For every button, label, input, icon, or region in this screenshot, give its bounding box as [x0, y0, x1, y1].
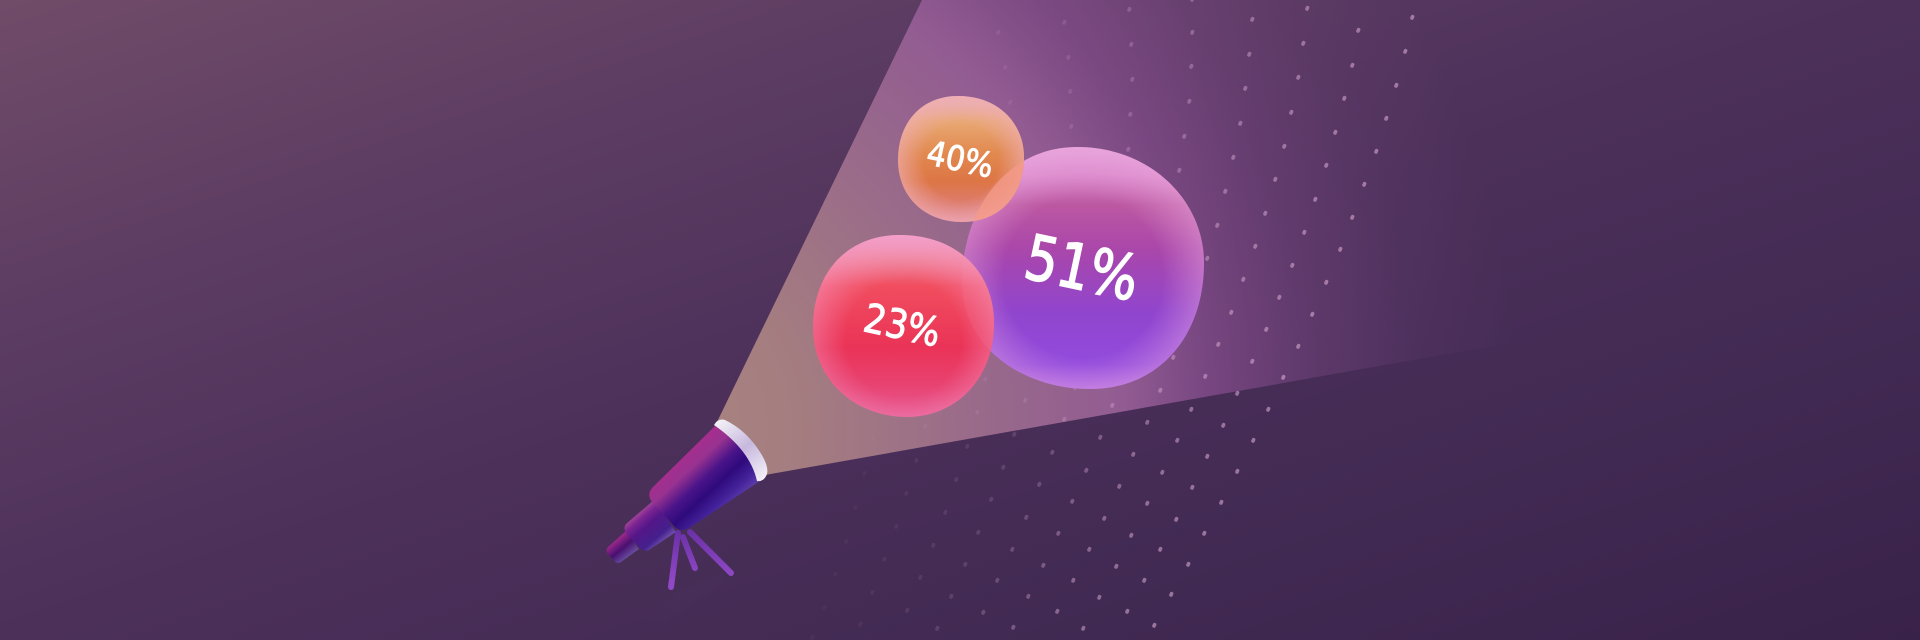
light beam [717, 0, 1920, 475]
bubble: 23%: 23% [860, 295, 944, 357]
bubble: 40%: 40% [923, 133, 997, 187]
icon: tripod shadow [645, 568, 735, 622]
bubble: 23% [813, 235, 994, 417]
icon: main tube [649, 425, 760, 530]
telescope [606, 420, 767, 622]
bubble: 51% [962, 147, 1204, 389]
icon: tripod legs [671, 532, 731, 587]
icon: eyepiece [606, 531, 639, 563]
icon: lens ring [714, 420, 767, 481]
bubble: 40% [898, 96, 1024, 222]
dotted star field [812, 0, 1413, 638]
bubble: 51%: 51% [1019, 220, 1145, 316]
icon: middle tube [624, 500, 676, 551]
